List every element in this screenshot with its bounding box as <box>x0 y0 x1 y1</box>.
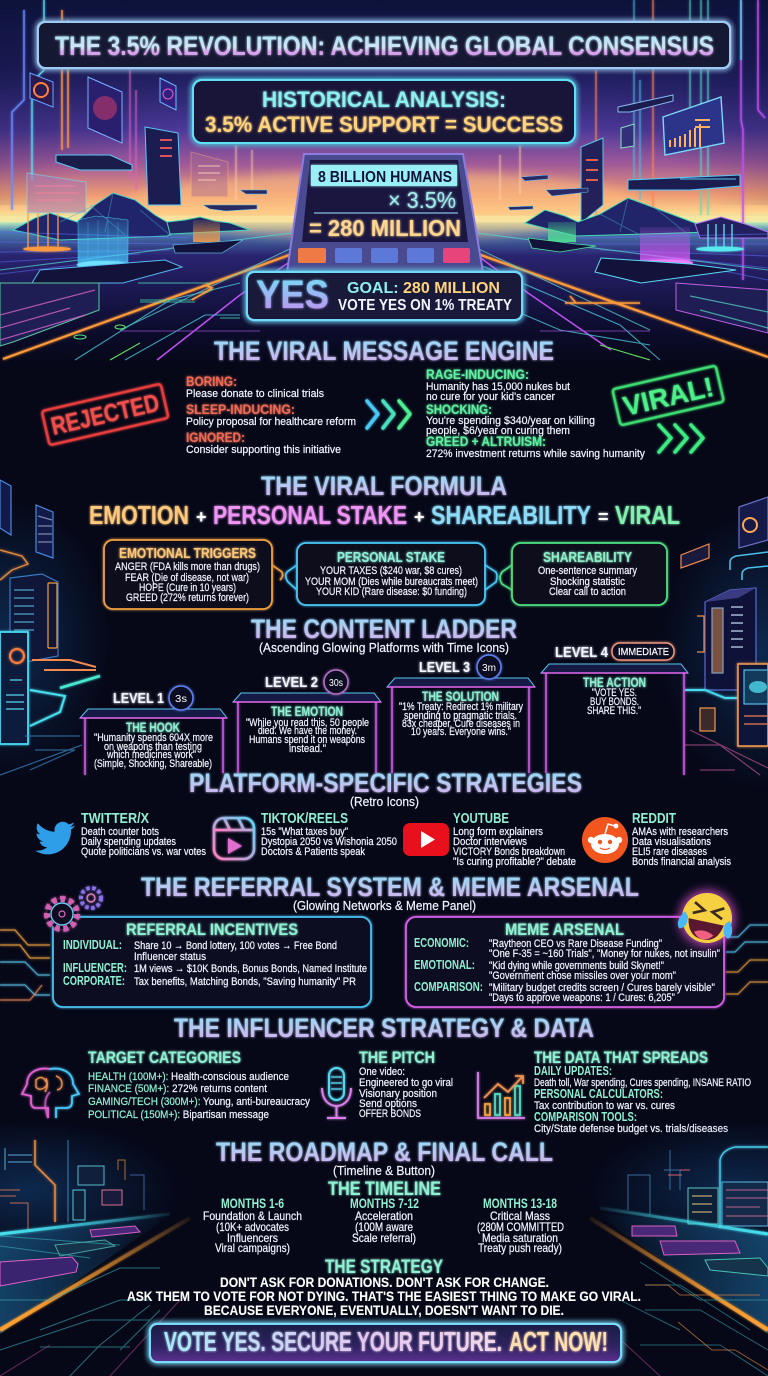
timeline: months 13-18: Media saturation <box>482 1232 558 1245</box>
subtitle: retro icons: (Retro Icons) <box>350 795 419 809</box>
button: vote yes: ACT NOW! <box>509 1326 608 1357</box>
subtitle: timeline and button: (Timeline & Button) <box>333 1164 435 1178</box>
text block: boring messages: BORING: <box>186 374 237 389</box>
timeline: months 7-12: Acceleration <box>355 1210 413 1223</box>
icon: growth chart <box>478 1072 525 1118</box>
timeline: months 13-18: (280M COMMITTED <box>477 1221 564 1234</box>
panel: referral incentives: Influencer status <box>134 951 206 963</box>
platform: reddit: AMAs with researchers <box>632 826 728 838</box>
stamp: rejected: REJECTED <box>48 389 162 441</box>
list: the pitch: OFFER BONDS <box>359 1108 421 1120</box>
calculator line: times 3.5%: × 3.5% <box>388 187 456 213</box>
panel: meme arsenal: COMPARISON: <box>414 980 483 994</box>
panel: personal stake: PERSONAL STAKE <box>337 550 445 566</box>
timeline: months 13-18: Treaty push ready) <box>478 1242 562 1255</box>
heading: referral system and meme arsenal: THE REFERRAL SYSTEM & MEME ARSENAL <box>141 872 639 902</box>
ladder level 1: (Simple, Shocking, Shareable) <box>94 758 212 770</box>
text block: the strategy: DON'T ASK FOR DONATIONS. DON'T ASK FOR CHANGE. <box>220 1275 549 1290</box>
background: top neon landscape <box>0 0 768 365</box>
ladder level 3: "1% Treaty: Redirect 1% military <box>399 701 523 713</box>
callout: historical analysis: HISTORICAL ANALYSIS: <box>262 87 506 112</box>
panel: personal stake: YOUR TAXES ($240 war, $8 cures) <box>320 565 462 577</box>
button: vote yes: VOTE YES. SECURE YOUR FUTURE. <box>164 1326 502 1357</box>
calculator line: 8 billion humans: 8 BILLION HUMANS <box>318 169 452 186</box>
panel: referral incentives: 1M views → $10K Bonds, Bonus Bonds, Named Institute <box>134 963 367 975</box>
ladder level 1: 3s <box>175 693 187 705</box>
platform: youtube: Doctor interviews <box>453 836 527 848</box>
floor grid lines <box>0 222 768 360</box>
timeline: months 13-18: Critical Mass <box>490 1210 550 1223</box>
timeline: months 7-12: (100M aware <box>355 1221 413 1234</box>
callout: historical analysis: 3.5% ACTIVE SUPPORT = SUCCESS <box>205 112 563 137</box>
panel: referral incentives: INDIVIDUAL: <box>63 938 122 952</box>
panel: personal stake: YOUR KID (Rare disease: $0 funding) <box>316 586 467 598</box>
list: the data that spreads: City/State defense budget vs. trials/diseases <box>534 1123 728 1135</box>
panel: meme arsenal: ECONOMIC: <box>414 936 469 950</box>
title banner <box>38 22 730 68</box>
panel: emotional triggers <box>104 540 272 609</box>
list: the data that spreads: Tax contribution to war vs. cures <box>534 1100 675 1112</box>
timeline: months 1-6 <box>203 1196 302 1255</box>
timeline: months 7-12: MONTHS 7-12 <box>350 1196 419 1211</box>
panel: personal stake <box>297 543 485 605</box>
formula line: = <box>598 507 609 527</box>
text block: viral messages: Humanity has 15,000 nukes but <box>426 381 571 393</box>
heading: platform-specific strategies: PLATFORM-SPECIFIC STRATEGIES <box>189 768 582 798</box>
icon: gears <box>47 888 101 929</box>
panel: meme arsenal: "One F-35 = ~160 Trials", "Money for nukes, not insulin" <box>489 948 720 960</box>
icon: reddit <box>582 817 628 863</box>
ladder level 2: Humans spend it on weapons <box>249 734 365 746</box>
subheading: the timeline: THE TIMELINE <box>328 1179 441 1200</box>
platform: twitter/x: Death counter bots <box>81 826 159 838</box>
platform: reddit <box>632 811 731 868</box>
panel: emotional triggers: ANGER (FDA kills more than drugs) <box>115 561 260 573</box>
ladder level 3: THE SOLUTION <box>422 689 499 704</box>
panel: personal stake: YOUR MOM (Dies while bureaucrats meet) <box>305 576 478 588</box>
goal badge <box>247 272 522 320</box>
list: target categories: GAMING/TECH (300M+): Young, anti-bureaucracy <box>88 1096 310 1108</box>
platform: youtube <box>453 811 576 868</box>
list: the pitch <box>359 1048 453 1120</box>
mountains <box>13 193 768 240</box>
panel: referral incentives: INFLUENCER: <box>63 961 127 975</box>
ladder level 3: 83x cheaper. Cure diseases in <box>402 718 520 730</box>
heading: the content ladder: THE CONTENT LADDER <box>251 614 517 644</box>
list: the pitch: Send options <box>359 1098 417 1110</box>
heading: the viral message engine: THE VIRAL MESSAGE ENGINE <box>214 336 554 366</box>
left screens and towers <box>27 73 267 213</box>
platform: tiktok/reels <box>261 811 397 858</box>
platform: tiktok/reels: Doctors & Patients speak <box>261 846 365 858</box>
ladder level 4: THE ACTION <box>583 675 646 690</box>
ladder level 1: which medicines work" <box>106 749 196 761</box>
text block: viral messages: 272% investment returns while saving humanity <box>426 448 645 460</box>
platform: twitter/x: Quote politicians vs. war votes <box>81 846 206 858</box>
panel: meme arsenal: EMOTIONAL: <box>414 958 475 972</box>
icon: twitter bird <box>35 822 75 854</box>
timeline: months 7-12 <box>350 1196 419 1245</box>
ladder level 4 <box>541 643 688 775</box>
platform: tiktok/reels: TIKTOK/REELS <box>261 811 348 827</box>
list: the pitch: Visionary position <box>359 1088 437 1100</box>
panel: shareability: One-sentence summary <box>538 565 637 577</box>
background: mid city right <box>660 497 768 790</box>
panel: meme arsenal: "Kid dying while governments build Skynet!" <box>489 960 664 972</box>
panel: referral incentives <box>53 917 371 1007</box>
timeline: months 1-6: Viral campaigns) <box>215 1242 290 1255</box>
big YES: YES <box>256 273 329 317</box>
text block: the strategy: ASK THEM TO VOTE FOR NOT DYING. THAT'S THE EASIEST THING TO MAKE GO VIRAL. <box>127 1289 641 1304</box>
subheading: the strategy: THE STRATEGY <box>325 1257 443 1278</box>
list: the pitch: One video: <box>359 1066 405 1078</box>
icon: tiktok/reels <box>214 818 254 859</box>
timeline: months 1-6: Influencers <box>227 1232 278 1245</box>
list: the data that spreads: THE DATA THAT SPREADS <box>534 1048 708 1067</box>
ladder level 2: died. We have the money. <box>258 725 357 737</box>
ladder level 2: "While you read this, 50 people <box>246 717 369 729</box>
ladder level 3: 10 years. Everyone wins." <box>411 726 511 738</box>
text block: boring messages: Please donate to clinical trials <box>186 388 324 400</box>
panel: meme arsenal: "Days to approve weapons: 1 / Cures: 6,205" <box>489 992 675 1004</box>
list: target categories: TARGET CATEGORIES <box>88 1048 241 1067</box>
platform: twitter/x <box>81 811 206 858</box>
platform: reddit: Bonds financial analysis <box>632 856 731 868</box>
panel: emotional triggers: GREED (272% returns forever) <box>126 592 249 604</box>
text block: the strategy: BECAUSE EVERYONE, EVENTUALLY, DOESN'T WANT TO DIE. <box>204 1303 564 1318</box>
panel: referral incentives: CORPORATE: <box>63 974 125 988</box>
divider and transform chevrons <box>367 371 410 460</box>
ladder level 4: LEVEL 4 <box>555 644 609 661</box>
text block: boring messages <box>186 374 356 456</box>
text block: viral messages: RAGE-INDUCING: <box>426 367 529 382</box>
background: bottom right cityscape and floor <box>588 1120 768 1376</box>
formula line: VIRAL <box>615 500 680 530</box>
formula line: SHAREABILITY <box>431 500 591 530</box>
heading: the viral formula: THE VIRAL FORMULA <box>261 471 507 501</box>
platform: twitter/x: TWITTER/X <box>81 811 149 827</box>
ladder level 2: 30s <box>329 677 343 689</box>
ladder level 4: SHARE THIS." <box>587 705 641 717</box>
formula line: EMOTION <box>89 500 189 530</box>
icon: viral chevrons <box>659 425 703 452</box>
platform: tiktok/reels: 15s "What taxes buy" <box>261 826 348 838</box>
list: target categories: POLITICAL (150M+): Bipartisan message <box>88 1109 269 1121</box>
platform: youtube: VICTORY Bonds breakdown <box>453 846 565 858</box>
text block: viral messages: people, $6/year on curing them <box>426 425 570 437</box>
list: the data that spreads: COMPARISON TOOLS: <box>534 1110 637 1124</box>
calculator buttons <box>298 248 470 263</box>
formula line <box>89 500 680 530</box>
stamp: viral: VIRAL! <box>620 371 717 422</box>
text block: the strategy <box>127 1275 641 1318</box>
ladder level 1: LEVEL 1 <box>113 690 164 707</box>
panel: meme arsenal: "Military budget credits screen / Cures barely visible" <box>489 982 715 994</box>
platform: youtube: YOUTUBE <box>453 811 509 827</box>
ladder level 1: "Humanity spends 604X more <box>94 732 213 744</box>
icon: laughing emoji <box>674 885 740 951</box>
link: formula box connectors <box>272 565 512 590</box>
icon: microphone <box>322 1068 351 1118</box>
background: mid city left <box>0 480 110 780</box>
formula line: PERSONAL STAKE <box>213 500 407 530</box>
list: the data that spreads: PERSONAL CALCULATORS: <box>534 1087 663 1101</box>
background: bottom left cityscape and floor <box>0 1120 190 1376</box>
ladder level 1 <box>80 686 227 775</box>
panel: shareability: Clear call to action <box>549 586 626 598</box>
formula line: + <box>414 507 425 527</box>
text block: boring messages: Consider supporting this initiative <box>186 444 341 456</box>
ladder level 2 <box>233 670 381 775</box>
timeline: months 1-6: Foundation & Launch <box>203 1210 302 1223</box>
timeline: months 7-12: Scale referral) <box>352 1232 416 1245</box>
timeline: months 1-6: (10K+ advocates <box>216 1221 289 1234</box>
icon: youtube <box>403 823 449 856</box>
panel: meme arsenal: "Government chose missiles over your mom" <box>489 970 676 982</box>
list: target categories: HEALTH (100M+): Health-conscious audience <box>88 1071 289 1083</box>
right screens and towers <box>508 95 740 223</box>
ladder level 2: LEVEL 2 <box>265 674 318 691</box>
heading: influencer strategy and data: THE INFLUENCER STRATEGY & DATA <box>174 1013 594 1043</box>
list: target categories <box>88 1048 310 1121</box>
formula line: + <box>196 507 207 527</box>
panel: meme arsenal: "Raytheon CEO vs Rare Disease Funding" <box>489 938 662 950</box>
ladder level 3: spending to pragmatic trials. <box>404 710 517 722</box>
heading: roadmap and final call: THE ROADMAP & FINAL CALL <box>216 1137 553 1167</box>
icon: two heads <box>22 1069 79 1118</box>
ladder level 2: instead." <box>289 743 326 755</box>
ladder level 3: 3m <box>482 662 496 674</box>
panel: meme arsenal <box>406 917 724 1007</box>
text block: viral messages: SHOCKING: <box>426 402 492 417</box>
calculator line: result: = 280 MILLION <box>309 215 461 241</box>
text block: boring messages: IGNORED: <box>186 430 245 445</box>
panel: referral incentives: Share 10 → Bond lottery, 100 votes → Free Bond <box>134 940 337 952</box>
text block: viral messages: You're spending $340/year on killing <box>426 415 595 427</box>
goal text: GOAL: 280 MILLION <box>347 280 500 297</box>
ladder level 4: BUY BONDS. <box>590 696 639 708</box>
subtitle: content ladder: (Ascending Glowing Platforms with Time Icons) <box>259 641 509 655</box>
list: the pitch: THE PITCH <box>359 1048 435 1067</box>
ladder level 3 <box>387 655 535 775</box>
panel: shareability: SHAREABILITY <box>543 550 632 566</box>
platform: youtube: "Is curing profitable?" debate <box>453 856 576 868</box>
text block: viral messages <box>426 367 645 460</box>
platform: reddit: Data visualisations <box>632 836 711 848</box>
platform: reddit: REDDIT <box>632 811 676 827</box>
ladder level 1: THE HOOK <box>126 720 180 735</box>
panel: meme arsenal: MEME ARSENAL <box>505 920 624 939</box>
panel: shareability: Shocking statistic <box>550 576 625 588</box>
platform: reddit: ELI5 rare diseases <box>632 846 707 858</box>
platform: youtube: Long form explainers <box>453 826 543 838</box>
text block: boring messages: SLEEP-INDUCING: <box>186 402 295 417</box>
panel: shareability <box>512 543 667 605</box>
list: the pitch: Engineered to go viral <box>359 1077 453 1089</box>
timeline: months 13-18: MONTHS 13-18 <box>483 1196 557 1211</box>
ladder level 1: on weapons than testing <box>104 741 202 753</box>
ladder level 3: LEVEL 3 <box>419 659 470 676</box>
platform: twitter/x: Daily spending updates <box>81 836 176 848</box>
list: target categories: FINANCE (50M+): 272% returns content <box>88 1083 268 1095</box>
vote text: VOTE YES ON 1% TREATY <box>338 297 512 314</box>
list: the data that spreads <box>534 1048 751 1135</box>
panel: emotional triggers: FEAR (Die of disease, not war) <box>125 572 249 584</box>
text block: viral messages: no cure for your kid's cancer <box>426 391 555 403</box>
holographic pedestals <box>0 213 768 346</box>
timeline: months 13-18 <box>477 1196 564 1255</box>
text block: viral messages: GREED + ALTRUISM: <box>426 434 546 449</box>
ladder level 4: "VOTE YES. <box>592 687 637 699</box>
calculator <box>287 154 483 272</box>
timeline: months 1-6: MONTHS 1-6 <box>221 1196 284 1211</box>
panel: emotional triggers: EMOTIONAL TRIGGERS <box>119 546 256 562</box>
subtitle: glowing networks: (Glowing Networks & Meme Panel) <box>293 899 476 913</box>
ladder level 4: IMMEDIATE <box>618 646 669 658</box>
callout: historical analysis <box>193 80 575 143</box>
panel: referral incentives: REFERRAL INCENTIVES <box>126 920 298 939</box>
background: circuit traces <box>0 925 768 1000</box>
list: the data that spreads: DAILY UPDATES: <box>534 1064 612 1078</box>
text block: boring messages: Policy proposal for healthcare reform <box>186 416 356 428</box>
ladder level 2: THE EMOTION <box>271 704 343 719</box>
platform: tiktok/reels: Dystopia 2050 vs Wishonia 2050 <box>261 836 397 848</box>
panel: referral incentives: Tax benefits, Matching Bonds, "Saving humanity" PR <box>134 976 356 988</box>
panel: emotional triggers: HOPE (Cure in 10 years) <box>139 582 236 594</box>
